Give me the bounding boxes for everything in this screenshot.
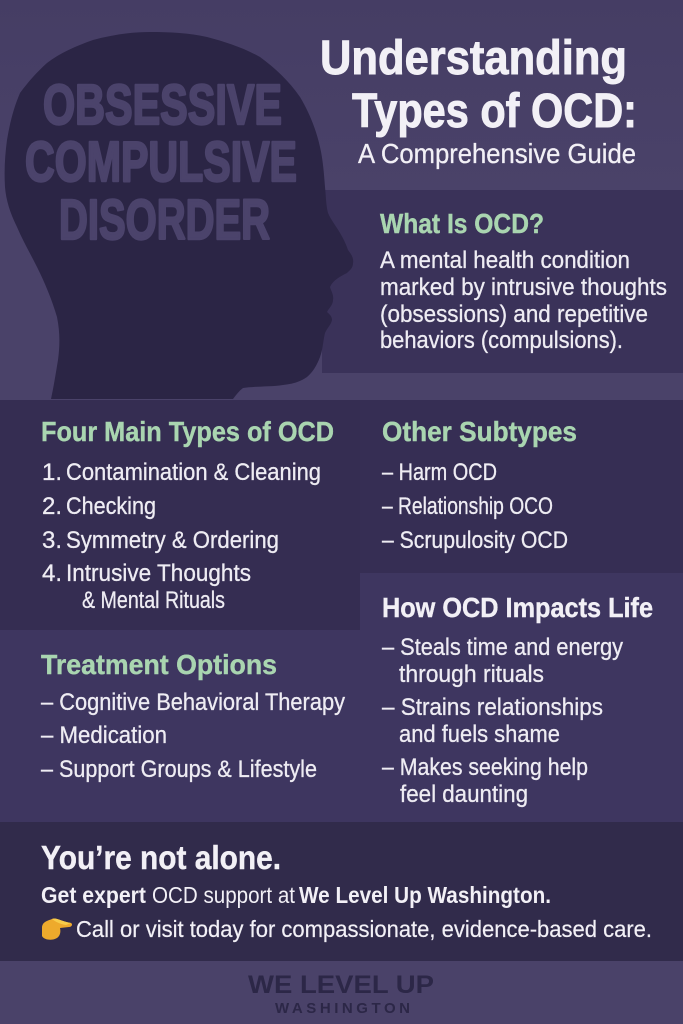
treatment list: – Cognitive Behavioral Therapy bbox=[41, 689, 345, 716]
illustration: head silhouette with disorder name bbox=[5, 32, 353, 399]
icon: pointing hand bbox=[42, 918, 72, 940]
impacts list bbox=[382, 634, 623, 808]
heading: how OCD impacts life: How OCD Impacts Life bbox=[382, 592, 653, 623]
numbered list of types: Symmetry & Ordering bbox=[66, 527, 279, 554]
support line: We Level Up Washington. bbox=[299, 882, 551, 908]
numbered list of types: Intrusive Thoughts bbox=[66, 560, 251, 587]
text: obsessive: OBSESSIVE bbox=[43, 73, 282, 137]
definition text bbox=[380, 247, 667, 354]
numbered list of types: Contamination & Cleaning bbox=[66, 459, 321, 486]
numbered list of types: Checking bbox=[66, 493, 156, 520]
impacts list: – Makes seeking help bbox=[382, 754, 588, 781]
numbered list of types: 3. bbox=[42, 527, 62, 554]
heading: you're not alone: You’re not alone. bbox=[41, 839, 281, 876]
subtypes list bbox=[382, 459, 568, 554]
treatment list: – Support Groups & Lifestyle bbox=[41, 756, 317, 783]
panel: call to action bbox=[0, 822, 683, 961]
support line bbox=[41, 882, 551, 908]
definition text: behaviors (compulsions). bbox=[380, 327, 623, 354]
impacts list: through rituals bbox=[399, 661, 544, 688]
heading: other subtypes: Other Subtypes bbox=[382, 416, 577, 447]
logo: we level up washington bbox=[248, 971, 434, 1017]
logo: we level up washington: WASHINGTON bbox=[275, 1000, 410, 1017]
impacts list: feel daunting bbox=[400, 781, 528, 808]
numbered list of types: 4. bbox=[42, 560, 62, 587]
definition text: A mental health condition bbox=[380, 247, 630, 274]
heading: treatment options: Treatment Options bbox=[41, 649, 277, 680]
impacts list: and fuels shame bbox=[399, 721, 560, 748]
logo: we level up washington: WE LEVEL UP bbox=[248, 971, 434, 999]
title block bbox=[320, 32, 637, 169]
panel: how OCD impacts life bbox=[360, 573, 683, 822]
panel: treatment options bbox=[0, 630, 360, 822]
call line: Call or visit today for compassionate, evidence-based care. bbox=[76, 916, 652, 942]
numbered list of types bbox=[42, 459, 321, 614]
text: compulsive: COMPULSIVE bbox=[25, 130, 297, 194]
subtypes list: – Relationship OCO bbox=[382, 493, 553, 520]
numbered list of types: 2. bbox=[42, 493, 62, 520]
definition text: marked by intrusive thoughts bbox=[380, 274, 667, 301]
subtypes list: – Scrupulosity OCD bbox=[382, 527, 568, 554]
numbered list of types: 1. bbox=[42, 459, 62, 486]
support line: Get expert bbox=[41, 882, 146, 908]
treatment list bbox=[41, 689, 345, 783]
subtitle: A Comprehensive Guide bbox=[358, 138, 636, 169]
title: types of OCD: Types of OCD: bbox=[352, 85, 637, 138]
numbered list of types: & Mental Rituals bbox=[82, 587, 225, 614]
definition text: (obsessions) and repetitive bbox=[380, 301, 648, 328]
title: understanding: Understanding bbox=[320, 32, 627, 85]
heading: four main types: Four Main Types of OCD bbox=[41, 416, 334, 447]
impacts list: – Strains relationships bbox=[382, 694, 603, 721]
text: disorder: DISORDER bbox=[59, 188, 270, 252]
panel: other subtypes bbox=[360, 400, 683, 573]
support line: OCD support at bbox=[152, 882, 296, 908]
panel: four main types of OCD bbox=[0, 400, 360, 630]
heading: what is OCD: What Is OCD? bbox=[380, 208, 544, 239]
treatment list: – Medication bbox=[41, 722, 167, 749]
impacts list: – Steals time and energy bbox=[382, 634, 623, 661]
panel: what is OCD bbox=[322, 190, 683, 373]
subtypes list: – Harm OCD bbox=[382, 459, 497, 486]
